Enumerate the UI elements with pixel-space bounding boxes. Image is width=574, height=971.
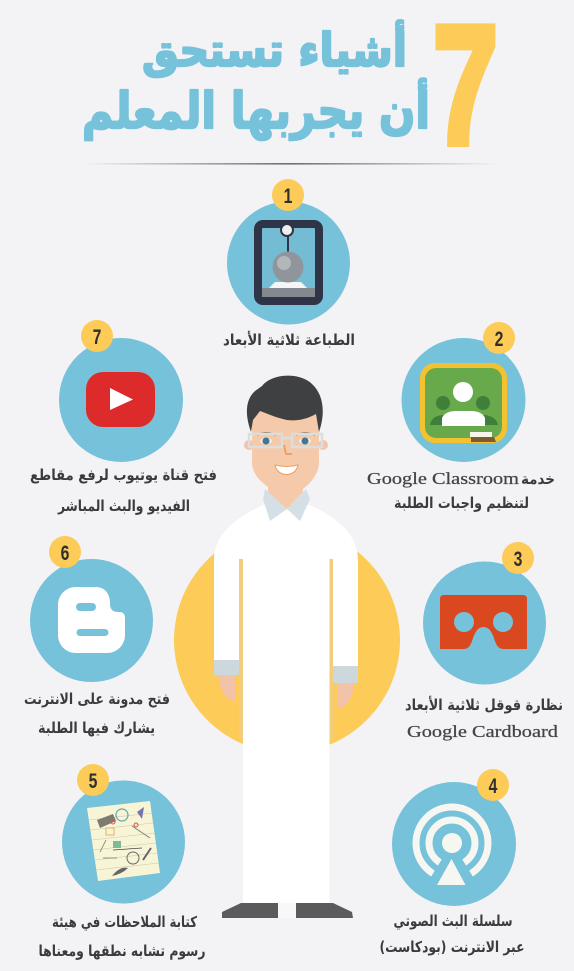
icon: Google Classroom bbox=[420, 363, 507, 443]
number badge: 5 bbox=[89, 769, 97, 793]
number badge: 1 bbox=[284, 184, 292, 208]
item 3: Google Cardboard bbox=[405, 542, 563, 741]
number badge: 2 bbox=[495, 327, 503, 351]
label: الطباعة ثلاثية الأبعاد bbox=[223, 331, 355, 349]
collar bbox=[263, 489, 287, 521]
hands bbox=[218, 672, 236, 701]
label line 2: رسوم تشابه نطقها ومعناها bbox=[38, 942, 206, 960]
circle bbox=[62, 780, 185, 904]
eyes bbox=[260, 438, 311, 444]
icon: podcast antenna bbox=[416, 807, 488, 888]
circle bbox=[423, 562, 546, 684]
item 7: YouTube bbox=[30, 320, 217, 515]
label line 2: يشارك فيها الطلبة bbox=[38, 719, 155, 737]
label line 1 latin: Google Classroom bbox=[367, 469, 519, 488]
number badge: 3 bbox=[514, 547, 522, 571]
icon: VR viewer bbox=[440, 595, 527, 649]
item 4: podcast bbox=[380, 769, 524, 956]
number badge: 4 bbox=[489, 774, 498, 798]
circle bbox=[227, 202, 350, 324]
label line 1: فتح قناة يوتيوب لرفع مقاطع bbox=[30, 466, 217, 484]
item 1: 3D printing bbox=[223, 179, 355, 349]
number badge bbox=[483, 322, 515, 354]
item 6: blog bbox=[24, 536, 170, 737]
label line 2: عبر الانترنت (بودكاست) bbox=[380, 938, 524, 956]
glasses bbox=[249, 434, 322, 447]
label line 2: Google Cardboard bbox=[407, 722, 559, 741]
nose bbox=[284, 445, 292, 454]
circle bbox=[392, 782, 516, 906]
number badge bbox=[502, 542, 534, 574]
number badge: 7 bbox=[93, 325, 101, 349]
icon: 3D printer bbox=[258, 224, 319, 301]
number badge bbox=[81, 320, 113, 352]
circle bbox=[30, 559, 153, 682]
label line 1: سلسلة البث الصوتي bbox=[394, 912, 512, 930]
icon: Blogger bbox=[58, 587, 125, 653]
label line 1: كتابة الملاحظات في هيئة bbox=[52, 913, 197, 931]
number badge bbox=[77, 764, 109, 796]
hair bbox=[247, 376, 323, 432]
title line 2: أن يجربها المعلم bbox=[82, 78, 430, 141]
label line 1: فتح مدونة على الانترنت bbox=[24, 690, 170, 708]
label line 2: الفيديو والبث المباشر bbox=[57, 497, 190, 515]
sleeve cuffs bbox=[214, 660, 239, 675]
number badge bbox=[477, 769, 509, 801]
gaps between sleeves and robe bbox=[239, 559, 243, 739]
title bbox=[82, 0, 498, 179]
shoes bbox=[222, 903, 278, 918]
mouth bbox=[275, 465, 298, 474]
item 5: sketch notes bbox=[38, 764, 206, 960]
gap between shoes bbox=[278, 903, 296, 918]
item 2: Google Classroom bbox=[367, 322, 555, 512]
circle bbox=[59, 338, 183, 462]
number badge bbox=[272, 179, 304, 211]
teacher figure bbox=[214, 376, 358, 918]
title line 1: أشياء تستحق bbox=[142, 20, 407, 77]
ears bbox=[244, 440, 254, 450]
number badge bbox=[49, 536, 81, 568]
circle bbox=[402, 338, 526, 462]
icon: doodled notebook bbox=[87, 801, 160, 881]
eyebrows bbox=[257, 433, 315, 435]
yellow circle behind figure bbox=[174, 527, 400, 753]
number badge: 6 bbox=[61, 541, 69, 565]
icon: YouTube bbox=[86, 372, 155, 427]
white robe bbox=[214, 505, 358, 903]
label line 2: لتنظيم واجبات الطلبة bbox=[394, 494, 529, 512]
face and neck bbox=[252, 410, 319, 509]
label line 1 arabic: خدمة bbox=[521, 470, 555, 488]
